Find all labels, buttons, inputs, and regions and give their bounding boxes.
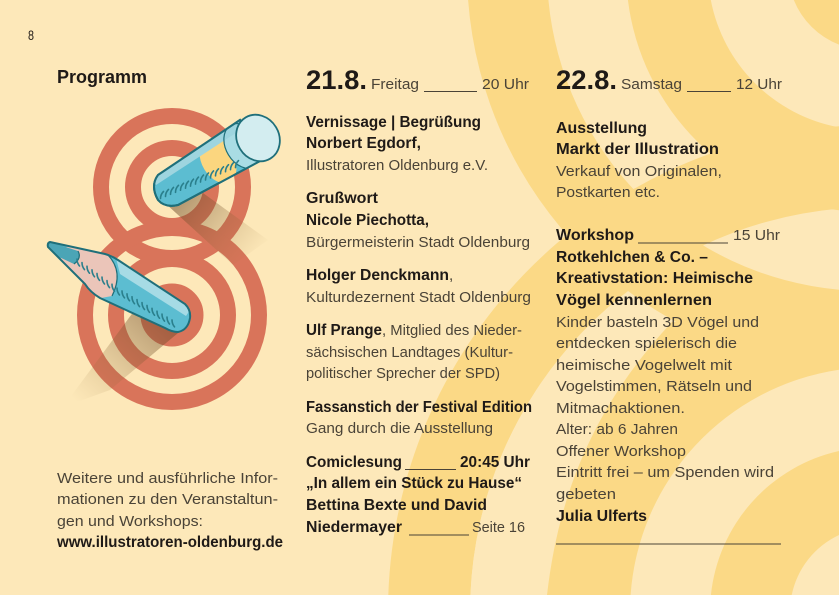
entry: Ausstellung (556, 120, 722, 201)
entry: Vernissage: Norbert Egdorf, (306, 135, 421, 152)
entry: Workshop: Workshop (556, 227, 634, 244)
entry: Ulf Prange: politischer Sprecher der SPD) (306, 365, 500, 382)
entry: Workshop: 15 Uhr (733, 227, 780, 244)
entry: Ausstellung: Markt der Illustration (556, 141, 719, 158)
column: programme 22.8. (556, 65, 782, 544)
text block: further information (56, 470, 283, 551)
entry: Vernissage: Illustratoren Oldenburg e.V. (306, 157, 488, 174)
heading: Programm: Programm (57, 67, 147, 87)
entry: Comiclesung: 20:45 Uhr (460, 454, 530, 471)
entry: Workshop: gebeten (556, 486, 616, 503)
text block: further information: gen und Workshops: (57, 513, 203, 530)
entry: Fassanstich: Fassanstich der Festival Edition (306, 399, 532, 416)
entry: Holger Denckmann (306, 267, 531, 306)
target rings forming the eight (85, 116, 259, 402)
entry: Comiclesung: „In allem ein Stück zu Hause“ (306, 475, 522, 492)
text block: further information: mationen zu den Veranstaltun- (57, 491, 278, 508)
background: interlocked concentric rings (388, 0, 839, 595)
date heading 22.8. (556, 65, 782, 95)
entry: Workshop: Eintritt frei – um Spenden wird (556, 464, 774, 481)
entry: Workshop: heimische Vogelwelt mit (556, 357, 733, 374)
entry: Ulf Prange: Ulf Prange (306, 322, 382, 339)
entry: Holger Denckmann: , (449, 267, 453, 284)
entry: Comiclesung (306, 454, 530, 536)
entry: Workshop: Mitmachaktionen. (556, 400, 685, 417)
page number: 8 (28, 27, 34, 43)
pencil shadows (63, 193, 268, 407)
entry: Comiclesung: Comiclesung (306, 454, 402, 471)
date heading 22.8.: 22.8. (556, 65, 617, 95)
entry: Workshop (556, 227, 781, 544)
date heading 22.8.: Samstag (621, 76, 682, 93)
entry: Fassanstich (306, 399, 532, 437)
entry: Vernissage (306, 114, 488, 174)
entry: Grußwort (306, 190, 530, 251)
entry: Workshop: Vögel kennenlernen (556, 292, 712, 309)
entry: Workshop: Julia Ulferts (556, 508, 647, 525)
entry: Workshop: Alter: ab 6 Jahren (556, 421, 678, 438)
entry: Fassanstich: Gang durch die Ausstellung (306, 420, 493, 437)
text block: further information: Weitere und ausführliche Infor- (57, 470, 278, 487)
entry: Holger Denckmann: Holger Denckmann (306, 267, 449, 284)
entry: Workshop: Kinder basteln 3D Vögel und (556, 314, 759, 331)
date heading 21.8.: 20 Uhr (482, 76, 529, 93)
entry: Ulf Prange (306, 322, 522, 382)
entry: Workshop: entdecken spielerisch die (556, 335, 737, 352)
column: programme 21.8. (306, 65, 532, 536)
entry: Grußwort: Bürgermeisterin Stadt Oldenburg (306, 234, 530, 251)
lower pencil (44, 240, 192, 332)
date heading 22.8.: 12 Uhr (736, 76, 782, 93)
entry: Grußwort: Grußwort (306, 190, 378, 207)
entry: Ulf Prange: sächsischen Landtages (Kultur- (306, 344, 513, 361)
entry: Vernissage: Vernissage | Begrüßung (306, 114, 481, 131)
upper pencil (153, 114, 281, 207)
date heading 21.8. (306, 65, 529, 95)
text block: further information: www.illustratoren-oldenburg.de (56, 534, 283, 551)
entry: Holger Denckmann: Kulturdezernent Stadt Oldenburg (306, 289, 531, 306)
date heading 21.8.: 21.8. (306, 65, 367, 95)
entry: Ausstellung: Verkauf von Originalen, (556, 163, 722, 180)
entry: Comiclesung: Bettina Bexte und David (306, 497, 487, 514)
illustration: number eight target with two pencils (44, 90, 290, 407)
entry: Comiclesung: Seite 16 (472, 519, 525, 536)
entry: Comiclesung: Niedermayer (306, 519, 402, 536)
entry: Workshop: Rotkehlchen & Co. – (556, 249, 708, 266)
entry: Workshop: Offener Workshop (556, 443, 686, 460)
entry: Ausstellung: Ausstellung (556, 120, 647, 137)
entry: Ausstellung: Postkarten etc. (556, 184, 660, 201)
entry: Workshop: Kreativstation: Heimische (556, 270, 753, 287)
entry: Grußwort: Nicole Piechotta, (306, 212, 429, 229)
entry: Ulf Prange: , Mitglied des Nieder- (382, 322, 522, 339)
date heading 21.8.: Freitag (371, 76, 419, 93)
entry: Workshop: Vogelstimmen, Rätseln und (556, 378, 752, 395)
